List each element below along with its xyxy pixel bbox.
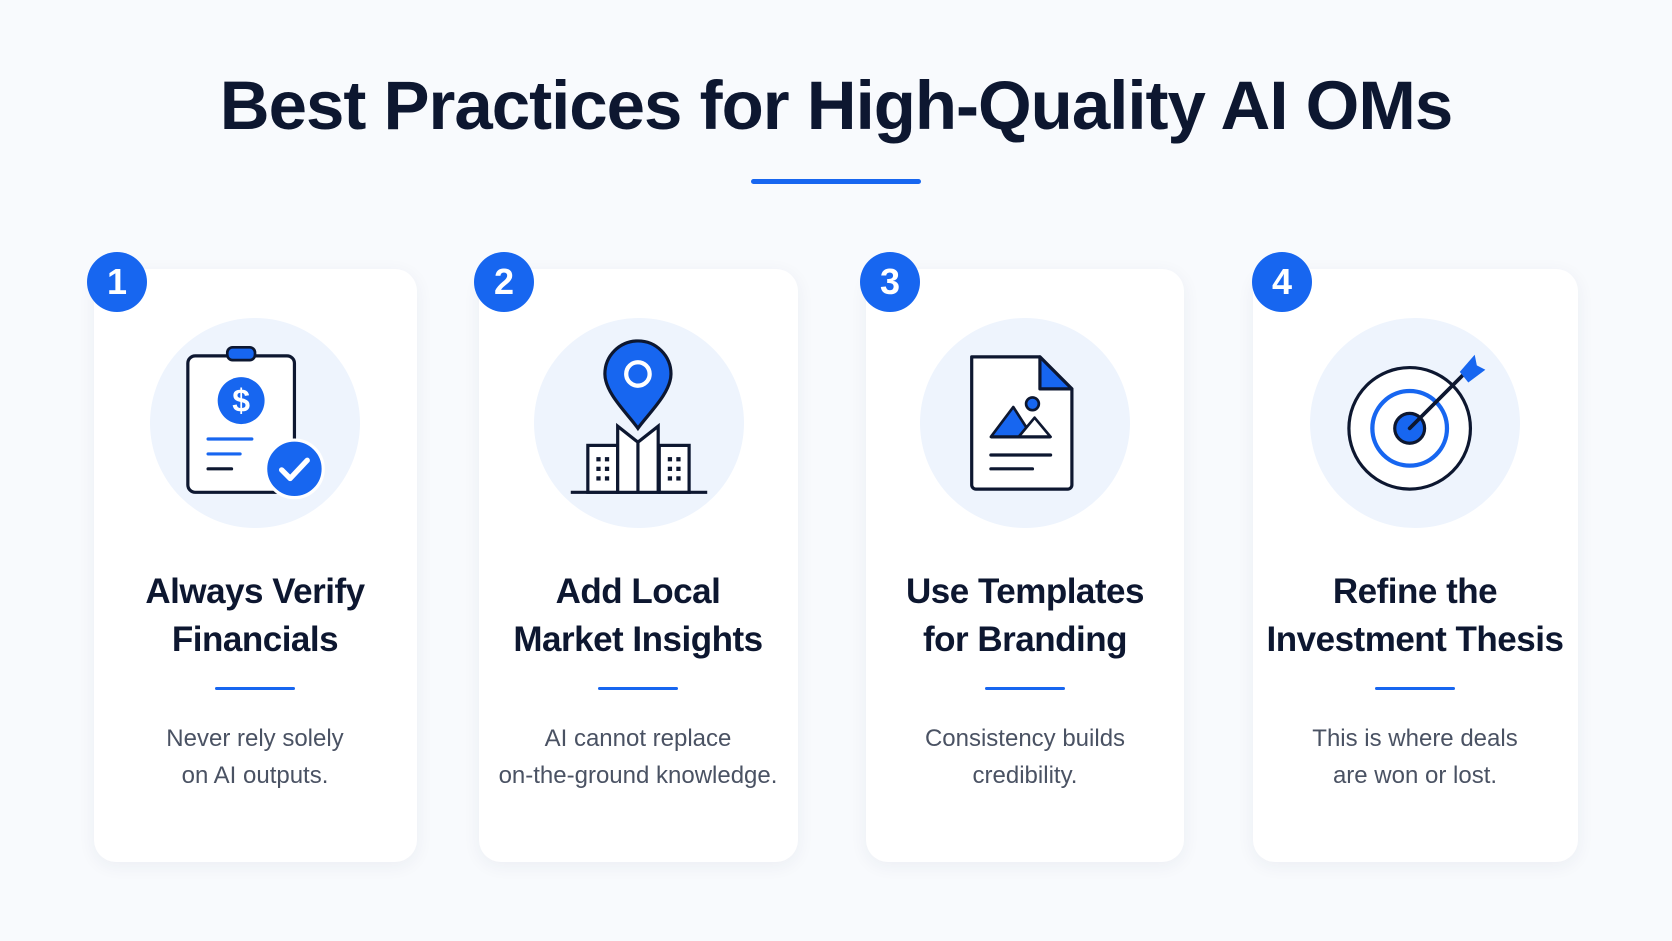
- icon: location pin over buildings: [570, 339, 708, 494]
- icon: document with image: [970, 355, 1074, 491]
- heading 3: [906, 572, 1144, 659]
- badge 2: [474, 252, 534, 312]
- description 4: [1312, 725, 1518, 789]
- description 3: [925, 725, 1125, 789]
- heading 1: Always Verify: [145, 572, 365, 611]
- icon circle 3: [920, 318, 1130, 528]
- description 4: This is where deals: [1312, 725, 1518, 752]
- icon: target with arrow: [1347, 354, 1486, 491]
- description 1: on AI outputs.: [182, 762, 328, 789]
- title underline: [751, 179, 921, 184]
- description 1: Never rely solely: [166, 725, 344, 752]
- heading 1: [145, 572, 365, 659]
- title: Best Practices for High-Quality AI OMs: [220, 67, 1452, 144]
- panel: card 1: [94, 269, 417, 862]
- description 2: on-the-ground knowledge.: [499, 762, 777, 789]
- description 3: Consistency builds: [925, 725, 1125, 752]
- badge 2: 2: [494, 261, 514, 302]
- heading 1: Financials: [172, 620, 338, 659]
- accent line 4: [1375, 687, 1455, 690]
- badge 1: 1: [107, 261, 127, 302]
- badge 3: [860, 252, 920, 312]
- heading 3: Use Templates: [906, 572, 1144, 611]
- icon circle 2: [534, 318, 744, 528]
- badge 3: 3: [880, 261, 900, 302]
- icon circle 1: [150, 318, 360, 528]
- accent line 2: [598, 687, 678, 690]
- heading 2: [513, 572, 763, 659]
- panel: card 3: [866, 269, 1184, 862]
- badge 4: 4: [1272, 261, 1292, 302]
- accent line 3: [985, 687, 1065, 690]
- panel: card 2: [479, 269, 798, 862]
- heading 2: Add Local: [556, 572, 720, 611]
- icon: clipboard with dollar and check: [186, 346, 325, 499]
- heading 4: Refine the: [1333, 572, 1497, 611]
- heading 3: for Branding: [923, 620, 1127, 659]
- description 2: [499, 725, 777, 789]
- badge 1: [87, 252, 147, 312]
- description 4: are won or lost.: [1333, 762, 1497, 789]
- accent line 1: [215, 687, 295, 690]
- panel: card 4: [1253, 269, 1578, 862]
- icon circle 4: [1310, 318, 1520, 528]
- heading 4: [1267, 572, 1563, 659]
- heading 2: Market Insights: [513, 620, 763, 659]
- icon: clipboard with dollar and check: $: [232, 382, 250, 418]
- badge 4: [1252, 252, 1312, 312]
- description 3: credibility.: [973, 762, 1077, 789]
- heading 4: Investment Thesis: [1267, 620, 1563, 659]
- description 2: AI cannot replace: [545, 725, 731, 752]
- description 1: [166, 725, 344, 789]
